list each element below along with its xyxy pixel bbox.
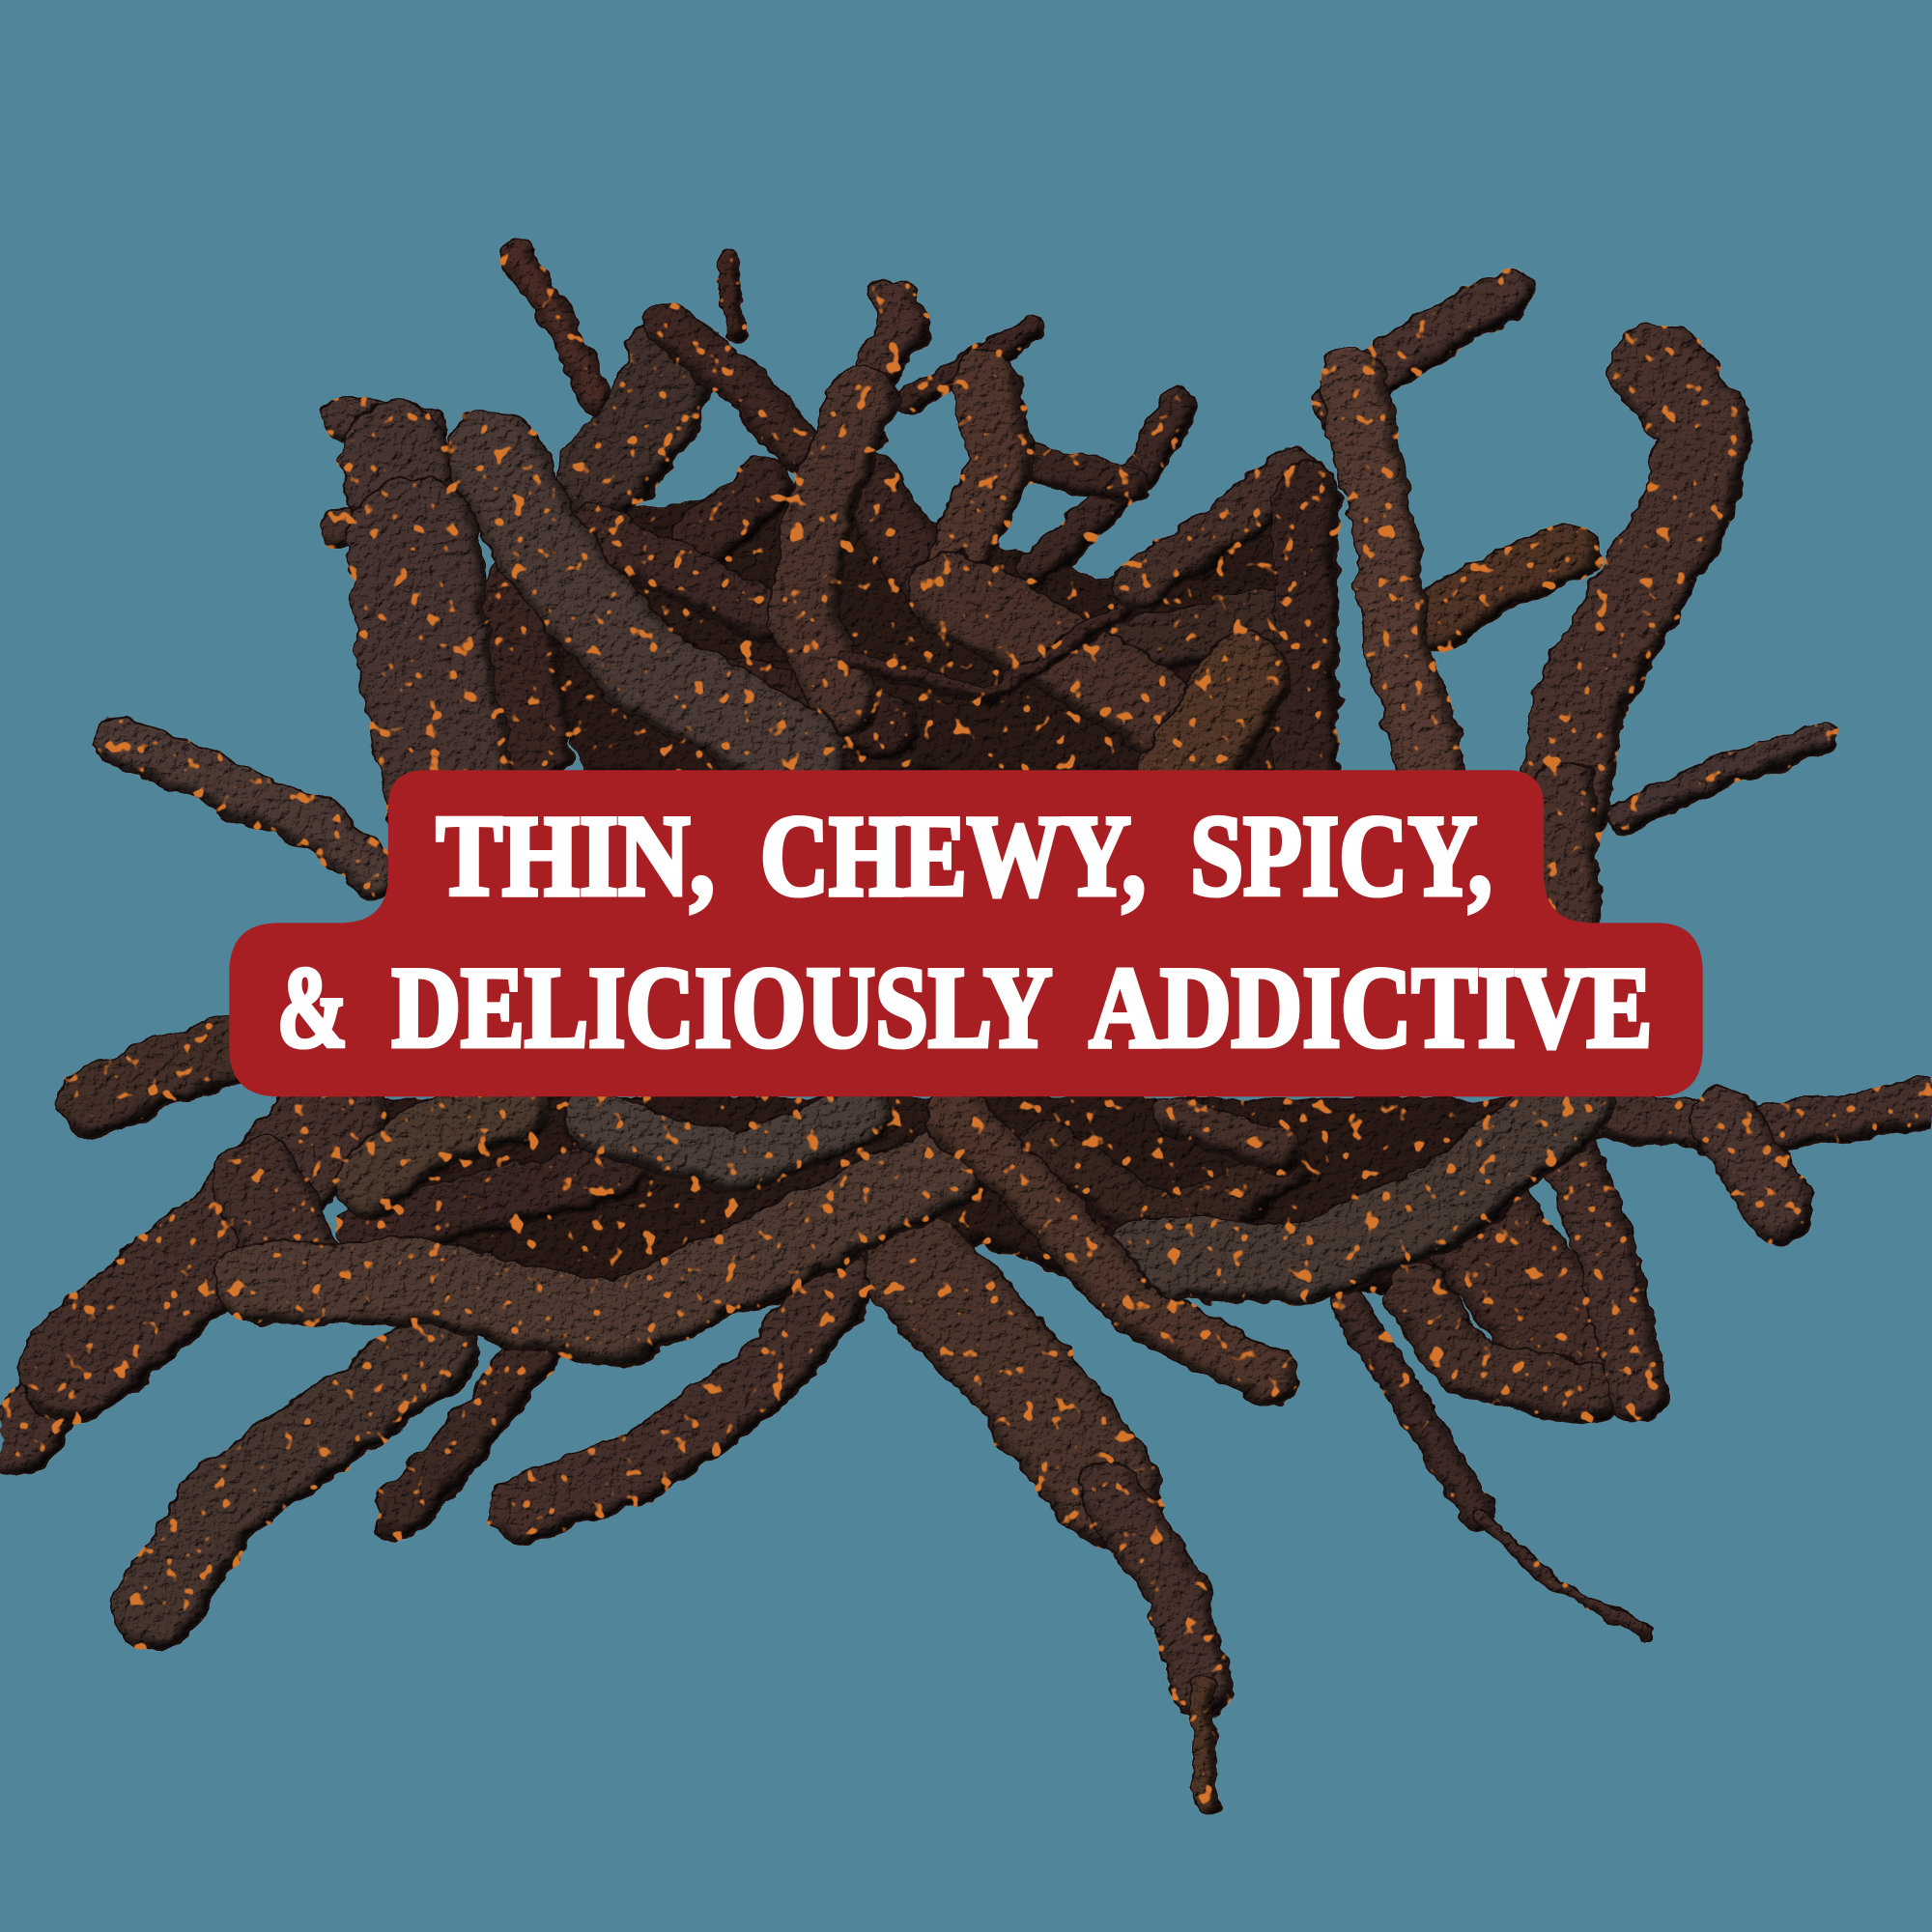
- banner shape: [229, 770, 1703, 1096]
- headline line 2: ADDICTIVE: [1090, 943, 1652, 1071]
- headline line 2: [277, 943, 1652, 1071]
- upper jerky cluster: [117, 252, 1821, 918]
- headline line 1: CHEWY,: [760, 791, 1146, 920]
- photo: pile of spicy jerky strips: [17, 252, 1928, 1805]
- headline line 1: THIN,: [437, 791, 715, 920]
- headline line 1: SPICY,: [1190, 791, 1492, 920]
- headline line 1: [437, 791, 1492, 920]
- red headline banner: [229, 770, 1703, 1096]
- headline line 2: DELICIOUSLY: [392, 943, 1052, 1071]
- lower jerky cluster: [17, 1047, 1928, 1805]
- headline line 2: &: [277, 943, 348, 1071]
